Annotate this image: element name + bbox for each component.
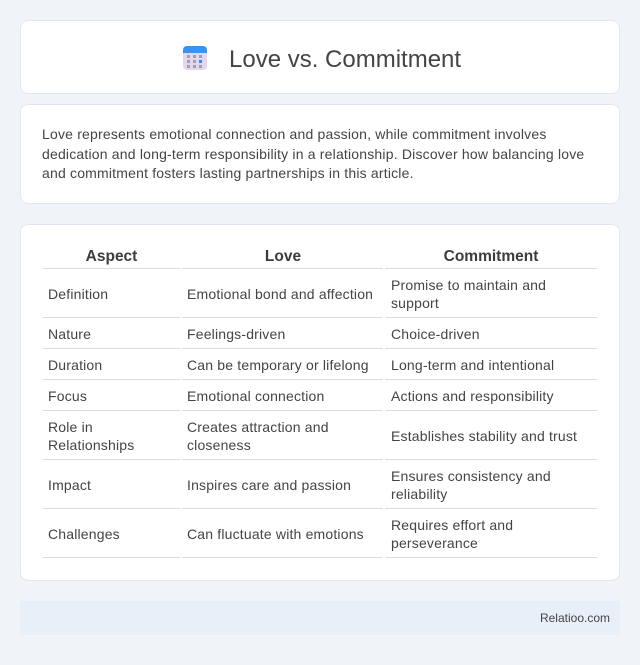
intro text: Love represents emotional connection and passion, while commitment involves	[42, 126, 547, 142]
table card	[20, 224, 620, 581]
footer bar	[20, 601, 620, 635]
comparison table: Creates attraction and	[187, 419, 329, 435]
column heading: Aspect: Aspect	[86, 248, 137, 265]
comparison table: Long-term and intentional	[391, 357, 554, 373]
intro text	[42, 126, 584, 181]
comparison table: Can fluctuate with emotions	[187, 526, 364, 542]
row: Duration: Duration	[48, 357, 102, 373]
comparison table: closeness	[187, 437, 251, 453]
comparison table: Feelings-driven	[187, 326, 285, 342]
comparison table: Requires effort and	[391, 517, 513, 533]
comparison table: support	[391, 295, 439, 311]
comparison table: Actions and responsibility	[391, 388, 554, 404]
comparison table: Promise to maintain and	[391, 277, 546, 293]
row: Definition: Definition	[48, 286, 108, 302]
icon: calendar	[183, 46, 207, 70]
comparison table: Establishes stability and trust	[391, 428, 577, 444]
comparison table: Emotional connection	[187, 388, 324, 404]
column heading: Love: Love	[265, 248, 301, 265]
row: Role in Relationships	[48, 419, 134, 453]
column heading: Commitment: Commitment	[444, 248, 538, 265]
row: Focus: Focus	[48, 388, 87, 404]
intro card	[20, 104, 620, 204]
comparison table: Inspires care and passion	[187, 477, 351, 493]
comparison table: Ensures consistency and	[391, 468, 551, 484]
comparison table: Emotional bond and affection	[187, 286, 373, 302]
header card	[20, 20, 620, 94]
intro text: and commitment fosters lasting partnerships in this article.	[42, 165, 414, 181]
row: Nature: Nature	[48, 326, 91, 342]
title: Love vs. Commitment	[229, 46, 461, 73]
comparison table: perseverance	[391, 535, 478, 551]
comparison table: Choice-driven	[391, 326, 480, 342]
footer credit: Relatioo.com	[540, 611, 610, 625]
row: Impact: Impact	[48, 477, 91, 493]
comparison table: reliability	[391, 486, 447, 502]
intro text: dedication and long-term responsibility in a relationship. Discover how balancing love	[42, 146, 584, 162]
row: Role in Relationships: Relationships	[48, 437, 134, 453]
row: Role in Relationships: Role in	[48, 419, 93, 435]
row: Challenges: Challenges	[48, 526, 120, 542]
comparison table: Can be temporary or lifelong	[187, 357, 369, 373]
